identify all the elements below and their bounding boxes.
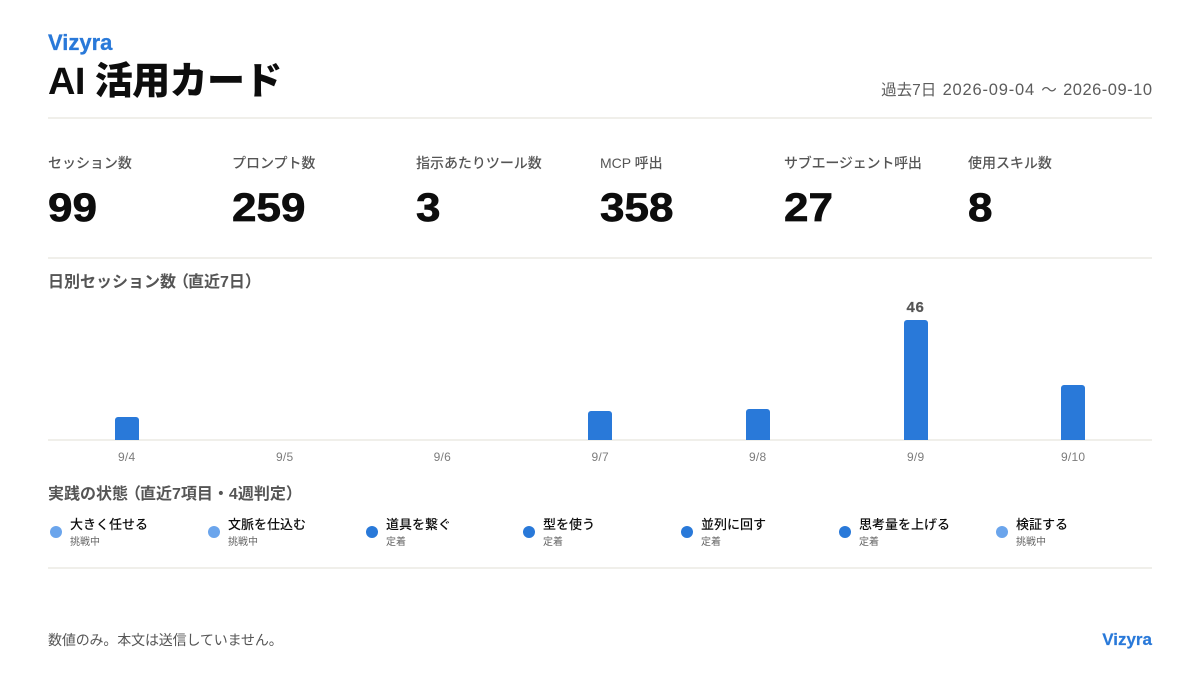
bar chart: daily sessions bbox=[48, 299, 1152, 464]
status: 型を使う: 定着 bbox=[543, 537, 563, 548]
footer brand: Vizyra bbox=[1102, 630, 1152, 649]
metric: MCP calls: MCP 呼出 bbox=[600, 155, 663, 171]
status: 大きく任せる: 挑戦中 bbox=[70, 537, 100, 548]
metric: sessions bbox=[48, 155, 132, 230]
status: 思考量を上げる: 思考量を上げる bbox=[859, 517, 950, 532]
day label 9/6: 9/6 bbox=[434, 450, 451, 464]
heading: practice status: 実践の状態（直近7項目・4週判定） bbox=[48, 486, 302, 503]
bar 9/7 bbox=[588, 411, 612, 440]
status: 並列に回す bbox=[681, 517, 766, 548]
value label 46: 46 bbox=[907, 299, 924, 316]
bar 9/10 bbox=[1061, 385, 1085, 440]
status: 検証する: 挑戦中 bbox=[1016, 537, 1046, 548]
metric: tools per instruction: 指示あたりツール数 bbox=[416, 155, 542, 171]
footer note: 数値のみ。本文は送信していません。 bbox=[48, 632, 283, 648]
status: 大きく任せる: 大きく任せる bbox=[70, 517, 148, 532]
status: 文脈を仕込む: 文脈を仕込む bbox=[228, 517, 306, 532]
bar 9/8 bbox=[746, 409, 770, 440]
status: 並列に回す: 並列に回す bbox=[701, 517, 766, 532]
status: 検証する: 検証する bbox=[1016, 517, 1068, 532]
status: 検証する bbox=[996, 517, 1068, 548]
status: 型を使う: 型を使う bbox=[543, 517, 595, 532]
status: 文脈を仕込む: 挑戦中 bbox=[228, 537, 258, 548]
day label 9/8: 9/8 bbox=[749, 450, 766, 464]
metric: prompts bbox=[232, 155, 315, 230]
metric: tools per instruction bbox=[416, 155, 542, 230]
day label 9/9: 9/9 bbox=[907, 450, 924, 464]
date range: 過去7日 2026-09-04 〜 2026-09-10 bbox=[881, 81, 1152, 99]
metric: subagent calls bbox=[784, 155, 922, 230]
status: 文脈を仕込む bbox=[208, 517, 306, 548]
status: 型を使う bbox=[523, 517, 595, 548]
status: 思考量を上げる: 定着 bbox=[859, 537, 879, 548]
metric: skills used bbox=[968, 155, 1052, 230]
title: AI 活用カード bbox=[48, 61, 282, 103]
status: 道具を繋ぐ: 道具を繋ぐ bbox=[386, 517, 451, 532]
day label 9/4: 9/4 bbox=[118, 450, 135, 464]
metric: prompts: 259 bbox=[232, 186, 305, 230]
bar 9/9 bbox=[904, 320, 928, 440]
metric: skills used: 8 bbox=[968, 186, 992, 230]
day label 9/10: 9/10 bbox=[1061, 450, 1085, 464]
metric: subagent calls: サブエージェント呼出 bbox=[784, 155, 922, 171]
status: 思考量を上げる bbox=[839, 517, 950, 548]
status: 道具を繋ぐ: 定着 bbox=[386, 537, 406, 548]
day label 9/7: 9/7 bbox=[591, 450, 609, 464]
bar 9/4 bbox=[115, 417, 139, 440]
metric: MCP calls: 358 bbox=[600, 186, 673, 230]
status: 並列に回す: 定着 bbox=[701, 537, 721, 548]
metrics row bbox=[48, 155, 1052, 230]
metric: MCP calls bbox=[600, 155, 673, 230]
brand name: Vizyra bbox=[48, 30, 112, 55]
metric: sessions: 99 bbox=[48, 186, 97, 230]
metric: skills used: 使用スキル数 bbox=[968, 155, 1052, 171]
day label 9/5: 9/5 bbox=[276, 450, 293, 464]
metric: sessions: セッション数 bbox=[48, 155, 132, 171]
metric: subagent calls: 27 bbox=[784, 186, 833, 230]
status: 大きく任せる bbox=[50, 517, 148, 548]
status: 道具を繋ぐ bbox=[366, 517, 451, 548]
metric: tools per instruction: 3 bbox=[416, 186, 440, 230]
metric: prompts: プロンプト数 bbox=[232, 155, 315, 171]
heading: daily sessions: 日別セッション数（直近7日） bbox=[48, 274, 261, 291]
